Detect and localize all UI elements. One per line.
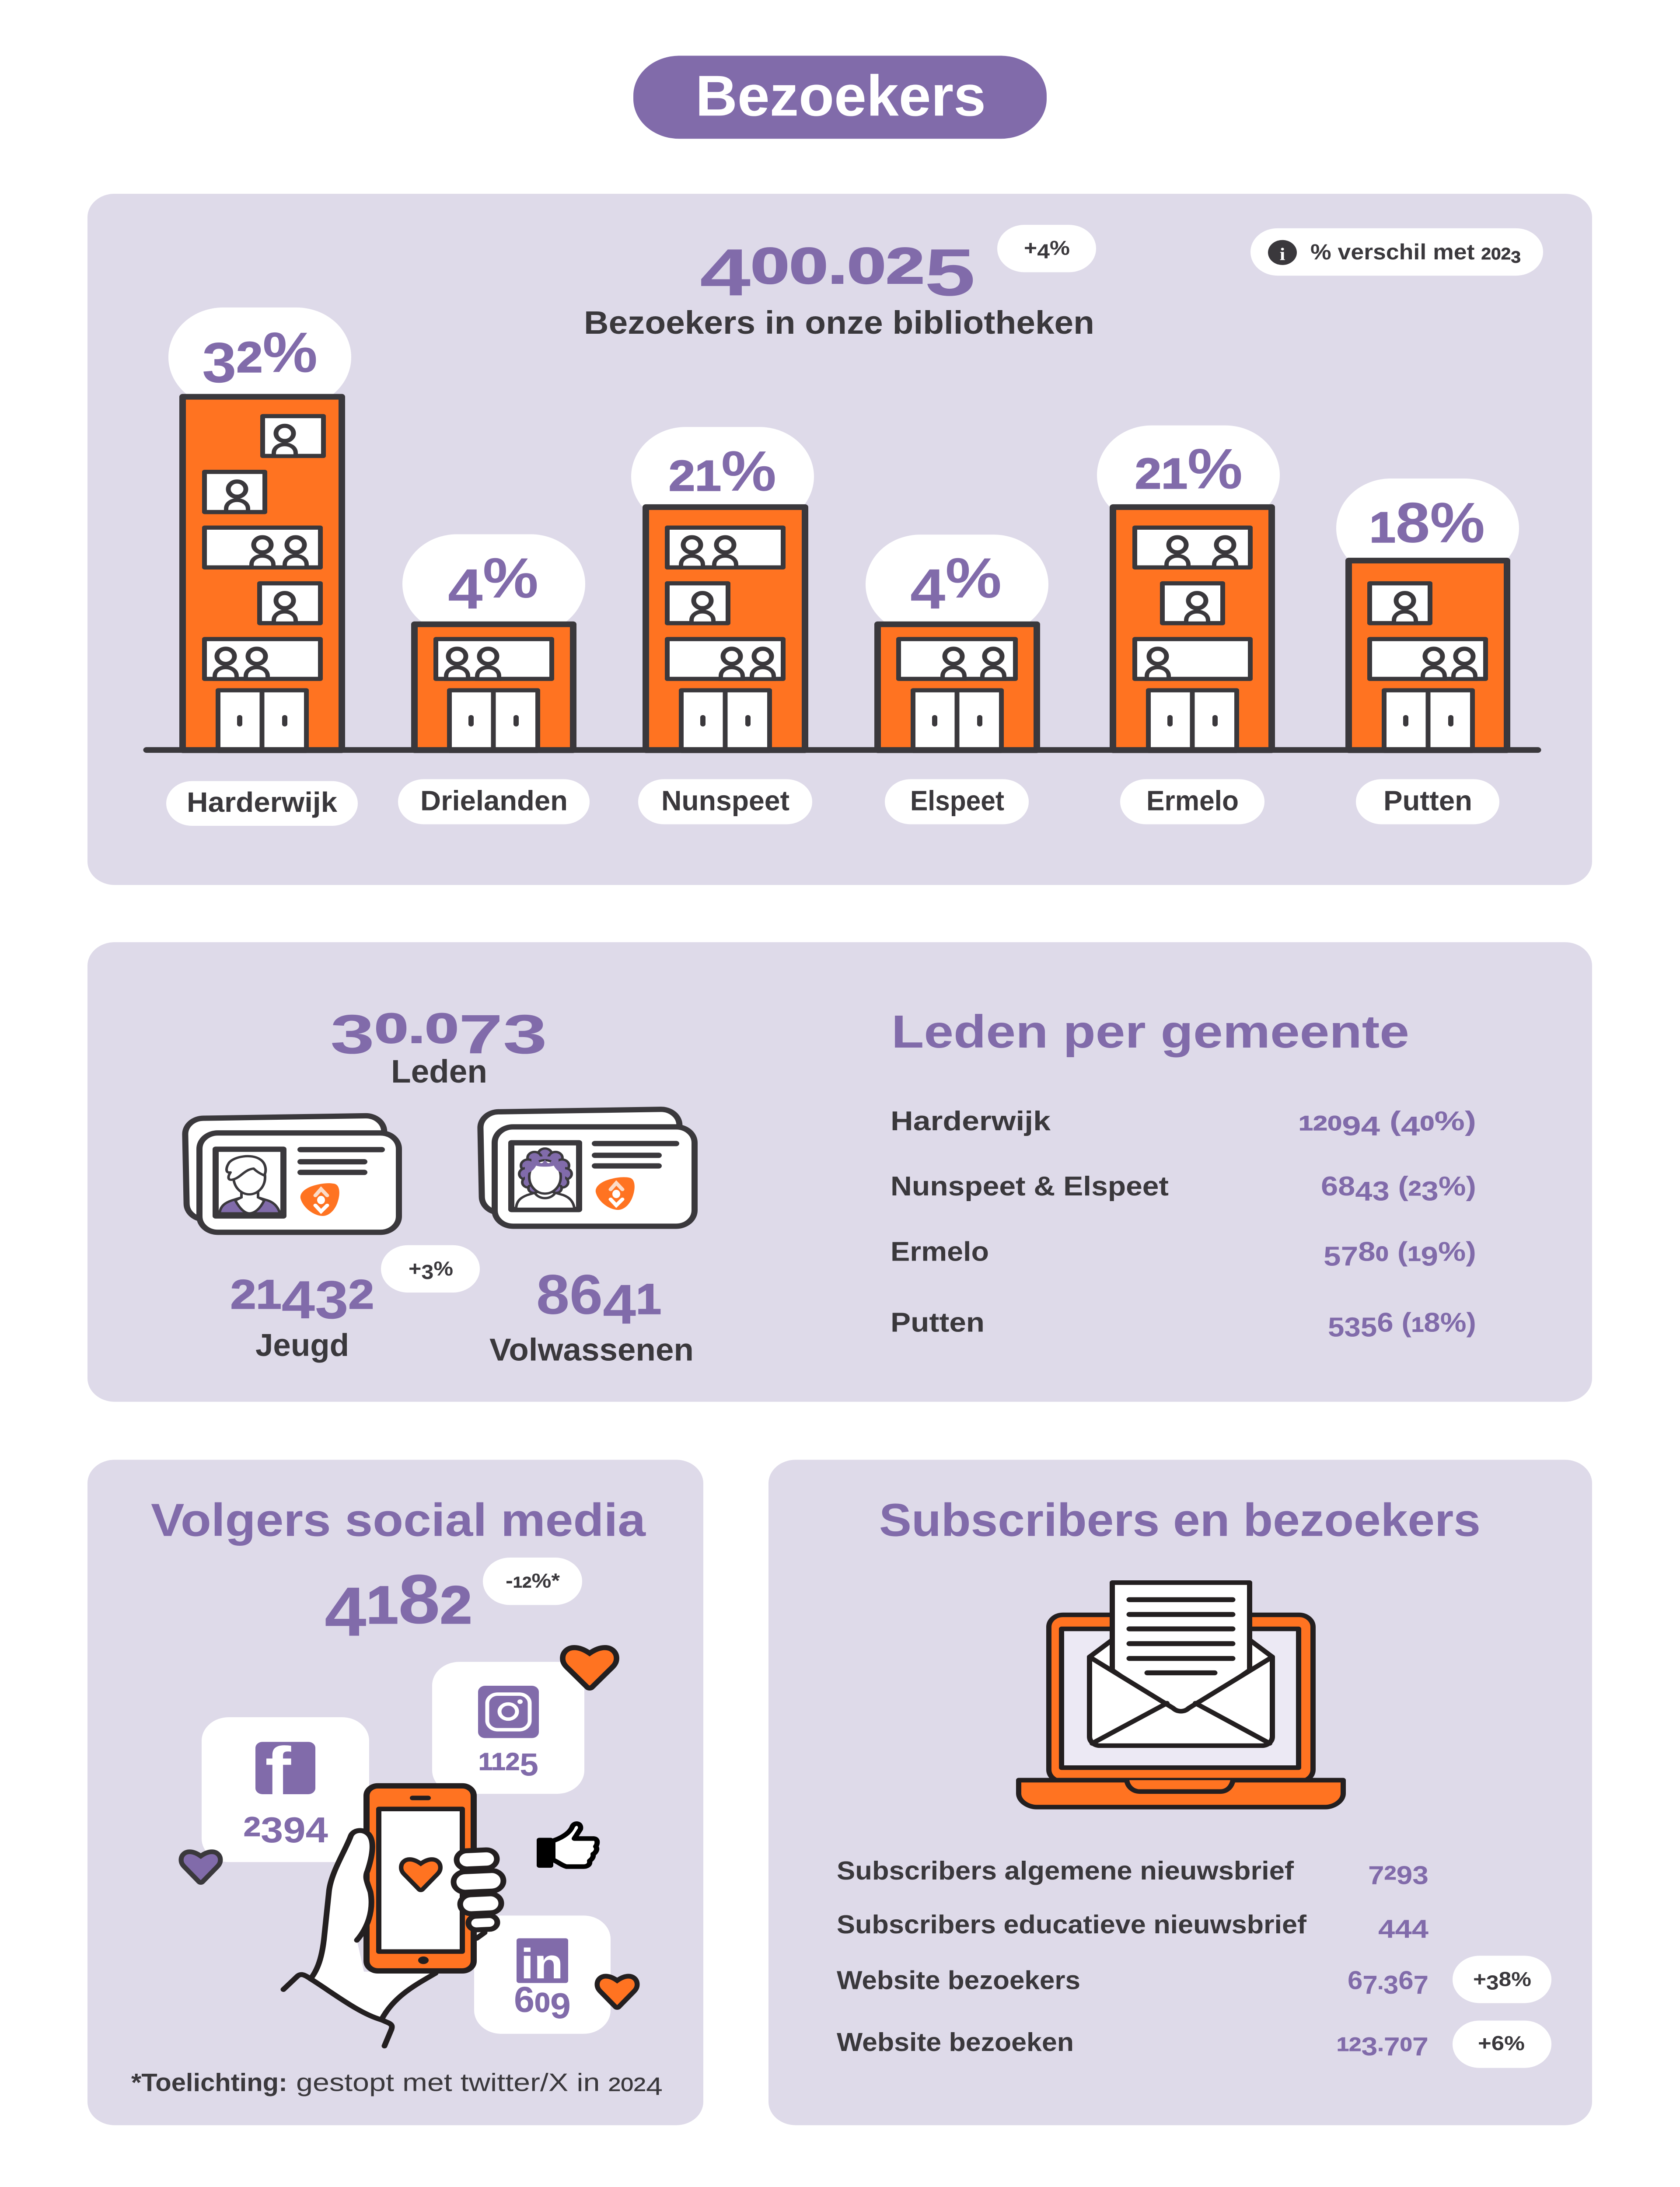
- icon: facebook: f: [265, 1733, 291, 1809]
- panel: leden: [87, 942, 1592, 1402]
- label: Putten: [1356, 779, 1499, 824]
- value 2394: 2: [244, 1812, 261, 1842]
- footnote: [131, 2069, 663, 2100]
- label: Harderwijk: [166, 781, 358, 826]
- badge +4%: [997, 225, 1096, 272]
- value 1125: 5: [520, 1747, 538, 1782]
- legend: % verschil met 2023: [1250, 228, 1543, 276]
- building: Ermelo: [1113, 507, 1272, 751]
- table: subscribers: 7: [1414, 1970, 1429, 1999]
- badge +6%: [1453, 2020, 1551, 2068]
- percentage values: [202, 321, 1485, 621]
- percentage values: 3: [202, 331, 237, 395]
- table: leden per gemeente: 4: [1401, 1111, 1420, 1141]
- table: leden per gemeente: %): [1434, 1106, 1473, 1136]
- icon: adult library card: [480, 1109, 695, 1226]
- headline number 400.025: 5: [925, 235, 975, 310]
- value 21432: 2: [349, 1272, 374, 1317]
- legend: % verschil met 2023: i: [1280, 245, 1285, 264]
- table: leden per gemeente: 6 (: [1377, 1307, 1411, 1338]
- badge +6%: +6%: [1478, 2031, 1525, 2054]
- table: subscribers: 6: [1398, 1966, 1414, 1995]
- card: facebook: [202, 1717, 369, 1862]
- table: subscribers: .: [1378, 1972, 1383, 1994]
- footnote: 4: [646, 2072, 663, 2100]
- label: Volwassenen: Volwassenen: [489, 1331, 694, 1367]
- total followers 4182: 1: [367, 1576, 398, 1635]
- illustration: laptop with envelope: [1019, 1583, 1343, 1807]
- table: subscribers: Subscribers algemene nieuwsbrief: [837, 1856, 1294, 1885]
- percentage values: %: [262, 321, 321, 384]
- badge -12%*: [483, 1558, 582, 1605]
- percentage values: 4: [910, 557, 945, 621]
- value 1125: 112: [479, 1748, 520, 1775]
- table: leden per gemeente: Nunspeet & Elspeet: [891, 1171, 1169, 1202]
- label: Leden: Leden: [391, 1053, 487, 1090]
- table: subscribers: 7: [1412, 2032, 1429, 2061]
- total followers 4182: 4: [325, 1573, 367, 1651]
- total members 30.073: 0.0: [374, 1005, 459, 1052]
- icon: facebook: [255, 1733, 315, 1809]
- table: subscribers: 6: [1348, 1966, 1364, 1995]
- table: subscribers: 7: [1368, 1861, 1384, 1890]
- badge -12%*: -12%*: [506, 1569, 560, 1592]
- table: subscribers: 3: [1383, 1970, 1398, 1999]
- label: Harderwijk: Harderwijk: [187, 786, 337, 818]
- badge +3%: [381, 1245, 480, 1293]
- legend: % verschil met 2023: 3: [1511, 248, 1521, 266]
- percentage values: 21%: [1135, 437, 1243, 500]
- card: instagram: [432, 1662, 584, 1794]
- value 21432: 43: [281, 1270, 349, 1330]
- value 8641: 4: [603, 1273, 636, 1336]
- table: leden per gemeente: 535: [1328, 1312, 1377, 1343]
- table: leden per gemeente: 18%): [1411, 1307, 1480, 1338]
- badge +38%: +: [1473, 1967, 1487, 1991]
- table: leden per gemeente: 0 (1: [1376, 1237, 1421, 1267]
- table: subscribers: 93: [1397, 1861, 1429, 1890]
- label: Ermelo: Ermelo: [1146, 785, 1239, 816]
- building: Harderwijk: [183, 397, 342, 751]
- building: Putten: [1349, 561, 1507, 751]
- value 21432: 21: [231, 1272, 281, 1317]
- table: leden per gemeente: Harderwijk: [891, 1106, 1051, 1136]
- building: Nunspeet: [646, 507, 805, 751]
- total members 30.073: 3: [330, 1003, 374, 1065]
- label: Ermelo: [1120, 779, 1264, 824]
- table: subscribers: Website bezoeken: [837, 2028, 1074, 2057]
- icon: orange heart top: [562, 1648, 617, 1688]
- icon: linkedin: in: [520, 1940, 563, 1988]
- illustration: hand holding phone: [283, 1786, 504, 2046]
- percentage values: %: [945, 546, 1002, 610]
- icon: orange heart bottom: [597, 1976, 637, 2007]
- title: Bezoekers: [633, 56, 1047, 139]
- table: subscribers: 444: [1378, 1915, 1429, 1943]
- heading: Leden per gemeente: Leden per gemeente: [891, 1006, 1409, 1058]
- table: leden per gemeente: 3: [1422, 1176, 1439, 1206]
- table: subscribers: 3: [1361, 2032, 1378, 2061]
- table: subscribers: Subscribers educatieve nieuwsbrief: [837, 1910, 1307, 1939]
- badge +38%: [1453, 1956, 1551, 2003]
- building: Elspeet: [877, 624, 1037, 751]
- table: leden per gemeente: 0: [1420, 1111, 1434, 1135]
- percentage bubbles: [168, 307, 1519, 634]
- panel: bezoekers in bibliotheken: [87, 194, 1592, 885]
- badge +4%: +: [1024, 236, 1038, 259]
- footnote: gestopt met twitter/X in 202: [296, 2069, 645, 2097]
- heading: Volgers social media: Volgers social media: [151, 1495, 646, 1546]
- label: Jeugd: Jeugd: [255, 1327, 349, 1363]
- table: leden per gemeente: 120: [1299, 1111, 1342, 1135]
- icon: instagram: [478, 1686, 539, 1738]
- table: leden per gemeente: (: [1380, 1106, 1401, 1136]
- table: leden per gemeente: 43: [1355, 1176, 1390, 1206]
- value 8641: 86: [536, 1264, 608, 1326]
- table: subscribers: 7: [1362, 1970, 1378, 1999]
- table: subscribers: .: [1378, 2033, 1384, 2055]
- table: leden per gemeente: 8: [1358, 1237, 1376, 1267]
- percentage values: %: [483, 546, 538, 610]
- card: linkedin: [474, 1915, 611, 2034]
- total members 30.073: 73: [459, 1003, 547, 1065]
- badge +3%: %: [433, 1257, 453, 1280]
- percentage values: 2: [237, 333, 262, 381]
- label: Elspeet: [885, 779, 1029, 824]
- value 8641: 1: [636, 1276, 661, 1323]
- building: Drielanden: [415, 624, 573, 751]
- panel: volgers social media: [87, 1460, 703, 2125]
- label: Putten: Putten: [1383, 785, 1472, 816]
- percentage values: 21%: [669, 439, 776, 503]
- badge +38%: 3: [1486, 1971, 1499, 1994]
- table: leden per gemeente: %): [1438, 1237, 1476, 1267]
- label: Nunspeet: Nunspeet: [661, 785, 789, 816]
- panel: subscribers en bezoekers: [768, 1460, 1592, 2125]
- value 2394: 394: [261, 1810, 328, 1850]
- table: leden per gemeente: Ermelo: [891, 1237, 989, 1267]
- table: leden per gemeente: Putten: [891, 1307, 985, 1338]
- label: Drielanden: Drielanden: [420, 785, 568, 816]
- table: subscribers: [837, 1856, 1429, 2061]
- label: Nunspeet: [638, 779, 812, 824]
- table: subscribers: 7: [1384, 2032, 1400, 2061]
- label: Elspeet: Elspeet: [910, 785, 1004, 816]
- ground line: [147, 747, 1538, 753]
- table: leden per gemeente: (: [1390, 1171, 1408, 1202]
- table: leden per gemeente: 57: [1324, 1241, 1358, 1272]
- value 609: 9: [550, 1986, 571, 2026]
- table: leden per gemeente: [891, 1106, 1476, 1343]
- table: leden per gemeente: 9: [1421, 1241, 1438, 1272]
- table: leden per gemeente: 2: [1408, 1177, 1422, 1200]
- icon: youth library card: [185, 1115, 399, 1232]
- value 609: 60: [514, 1979, 552, 2019]
- percentage values: 4: [448, 557, 483, 621]
- table: subscribers: 2: [1384, 1862, 1397, 1884]
- badge +38%: 8%: [1499, 1967, 1531, 1991]
- table: subscribers: Website bezoekers: [837, 1966, 1080, 1995]
- footnote: *Toelichting:: [131, 2069, 287, 2097]
- table: subscribers: 12: [1337, 2033, 1361, 2055]
- headline number 400.025: 00.02: [751, 238, 925, 294]
- table: leden per gemeente: %): [1439, 1171, 1476, 1202]
- table: leden per gemeente: 68: [1321, 1171, 1356, 1202]
- badge +4%: 4: [1037, 240, 1050, 263]
- table: leden per gemeente: 94: [1342, 1111, 1380, 1141]
- badge +3%: +: [409, 1257, 423, 1280]
- icon: purple heart: [181, 1852, 220, 1883]
- total followers 4182: 82: [398, 1560, 474, 1638]
- badge +4%: %: [1050, 236, 1070, 259]
- title: Bezoekers: Bezoekers: [695, 64, 986, 128]
- icon: thumbs up: [537, 1824, 597, 1868]
- percentage values: 18%: [1369, 491, 1485, 554]
- legend: % verschil met 2023: % verschil met 202: [1310, 240, 1513, 264]
- table: subscribers: 0: [1400, 2033, 1412, 2055]
- label: Drielanden: [398, 779, 590, 824]
- headline number 400.025: 4: [700, 235, 751, 310]
- subtitle: Bezoekers in onze bibliotheken: [584, 304, 1094, 341]
- badge +3%: 3: [421, 1260, 433, 1283]
- heading: Subscribers en bezoekers: Subscribers en bezoekers: [879, 1495, 1481, 1546]
